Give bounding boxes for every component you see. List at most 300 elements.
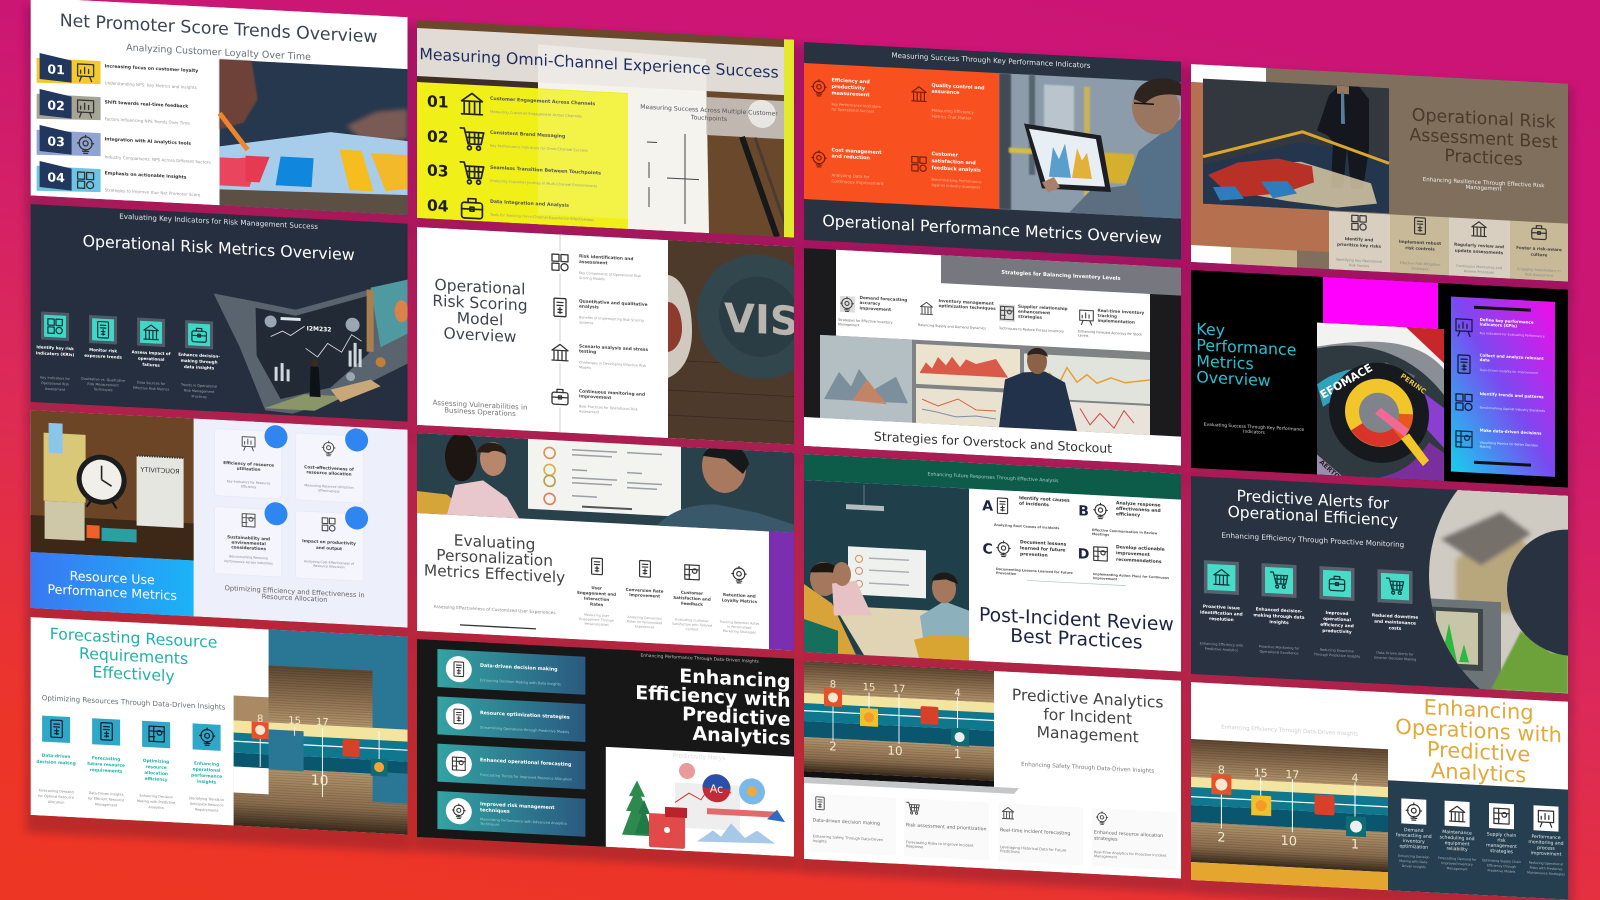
numbered item 02: 02 xyxy=(47,97,65,113)
kpi step: decisions: Making xyxy=(1480,445,1491,449)
step: enhancing: Enhancing xyxy=(194,761,219,768)
step: optimizing: efficiency xyxy=(145,776,168,783)
step: optimizing: Analytics xyxy=(148,805,164,810)
step: proactive issue xyxy=(1200,560,1243,653)
step: quantitative analysis: analysis xyxy=(579,303,599,310)
technique: forecasting: Enhanced operational forecasting xyxy=(480,757,572,768)
strategy: forecasting xyxy=(838,294,907,330)
item B: Analyze response xyxy=(1116,500,1161,509)
footer band xyxy=(804,417,1181,466)
metric text columns: Operational Risk xyxy=(41,381,69,387)
metric text columns: operational xyxy=(138,356,165,362)
metric: satisfaction: Against Industry Standards xyxy=(932,183,980,190)
step: demand forecasting: forecasting and xyxy=(1396,832,1432,840)
metric text columns: Enhance decision- xyxy=(178,352,220,359)
title: Operations with xyxy=(1395,714,1562,747)
timeline photo: 17 xyxy=(1285,768,1299,782)
step: enhancing: Anticipate Resource xyxy=(190,802,224,808)
card: productivity: Impact on productivity xyxy=(302,538,356,546)
step: improved efficiency: Reducing Downtime xyxy=(1320,648,1354,653)
step: forecasting: for Efficient Resource xyxy=(88,796,124,802)
title: Predictive Alerts for xyxy=(1237,487,1390,513)
metric: conversion xyxy=(626,560,664,630)
metric: quality: Measuring Efficiency xyxy=(932,108,974,115)
item 01: 01 xyxy=(427,93,449,112)
metric text columns: Identify key risk xyxy=(36,344,74,351)
step: proactive issue: identification and xyxy=(1200,609,1243,618)
step: identify: Identify and xyxy=(1345,236,1373,242)
item A xyxy=(982,493,1070,531)
card: resource allocation: Enhanced resource allocation xyxy=(1094,830,1163,839)
title: Effectively xyxy=(93,662,175,685)
faint subtitle: Enhancing Efficiency Through Data-Driven Insights xyxy=(1221,725,1358,738)
step: quantitative analysis xyxy=(549,296,648,328)
step: data-driven: decision making xyxy=(36,759,76,767)
kpi step: define: Key Indicators for Evaluating Performance xyxy=(1480,331,1545,338)
kpi step: decisions xyxy=(1456,426,1542,452)
step: maintenance: Forecasting Demand for xyxy=(1438,856,1477,862)
timeline photo with teal blocks: 17 xyxy=(316,717,329,729)
timeline photo with teal blocks xyxy=(234,628,408,835)
step: supply chain: Efficiency through xyxy=(1487,863,1516,869)
metric: satisfaction: Customer xyxy=(932,151,959,159)
collage: data dashboard silhouette xyxy=(214,270,409,420)
item A: A xyxy=(982,498,993,515)
numbered item 01: Understanding NPS: Key Metrics and Insights xyxy=(105,80,197,90)
step: proactive issue: resolution xyxy=(1209,616,1234,623)
step: review: Continuous Monitoring and xyxy=(1456,264,1502,270)
item C: Prevention xyxy=(996,571,1017,576)
card: efficiency: utilization xyxy=(237,466,261,472)
step: optimizing: Enhancing Decision xyxy=(139,794,173,799)
numbered item 01 xyxy=(37,53,198,91)
metric: satisfaction: Satisfaction and xyxy=(673,595,711,602)
item 04: Tools for Tracking Omni-Channel Experience Effectiveness xyxy=(489,213,594,222)
slide: Predictive Alerts for Operational Efficiency xyxy=(1191,476,1600,697)
step: decision making: insights xyxy=(1269,619,1289,626)
title: Assessment Best xyxy=(1409,125,1558,153)
step: forecasting: Forecasting xyxy=(92,755,120,763)
step: demand forecasting: Making with Data- xyxy=(1399,859,1428,864)
laptop with timeline graphic: 2 xyxy=(829,739,837,754)
metric text columns: Practices xyxy=(191,394,207,399)
gauge photo xyxy=(1317,322,1444,481)
technique: forecasting: Forecasting Trends for Improved Resource Allocation xyxy=(480,773,572,782)
item D: Implementing Action Plans for Continuous xyxy=(1093,572,1169,580)
step: culture: Risk Assessment xyxy=(1525,272,1554,278)
metric text columns: Effective Risk Metrics xyxy=(133,386,169,392)
photo: hand pointing at tablet chart xyxy=(220,59,408,215)
dark panel xyxy=(1388,780,1568,900)
step: proactive issue: Enhancing Efficiency with xyxy=(1200,641,1243,648)
item A: Analyzing Root Causes of Incidents xyxy=(994,523,1059,530)
subtitle: Enhancing Safety Through Data-Driven Insights xyxy=(1021,762,1154,775)
step: review: Review Processes xyxy=(1464,269,1494,275)
gauge photo: PERINC xyxy=(1399,372,1427,396)
item D: D xyxy=(1078,546,1089,563)
title: Model xyxy=(457,309,503,329)
item A: Identify root causes xyxy=(1019,495,1070,504)
metric: satisfaction: Customer xyxy=(681,590,703,596)
metric text columns xyxy=(36,344,220,400)
metric: efficiency: Efficiency and xyxy=(832,77,870,85)
kpi step: trends xyxy=(1456,390,1545,414)
item 02: Key Performance Indicators for Omni-Channel Success xyxy=(490,144,588,153)
step: identify: Risk Factors xyxy=(1349,263,1369,268)
title: Measuring Omni-Channel Experience Success xyxy=(419,44,779,82)
kpi step: decisions: Visualizing Metrics for Better Decision xyxy=(1480,441,1538,448)
card: resource allocation xyxy=(1092,808,1177,870)
subtitle: Touchpoints xyxy=(690,114,727,123)
step: supply chain: Predictive Models xyxy=(1488,868,1516,874)
item 02: Consistent Brand Messaging xyxy=(490,130,565,140)
step: optimizing: allocation xyxy=(144,770,168,777)
metric: engagement: Engagement and xyxy=(577,590,616,597)
metric text columns: Key Indicators for xyxy=(40,376,71,381)
item 01: Measuring Customer Engagement Across Channels xyxy=(490,110,582,119)
slide: Operational Performance Metrics Overview xyxy=(804,42,1181,260)
item 02: 02 xyxy=(427,128,449,147)
kpi step: define: indicators (KPIs) xyxy=(1480,322,1517,328)
metric: satisfaction: Benchmarking Performance xyxy=(932,178,982,184)
subtitle: Optimizing Resources Through Data-Driven Insights xyxy=(42,693,226,712)
strategy: supplier: strategies xyxy=(1018,314,1042,320)
metric: engagement: Interaction xyxy=(584,596,609,602)
item 04: Data Integration and Analysis xyxy=(490,199,569,209)
timeline photo: 1 xyxy=(1351,837,1359,853)
step: risk identification: Key Components of Operational Risk xyxy=(579,271,641,278)
step: improved efficiency: Through Predictive Insights xyxy=(1313,652,1360,659)
title: Resource Use xyxy=(70,568,155,587)
title: Risk Scoring xyxy=(432,292,528,315)
step: performance: Performance xyxy=(1531,834,1561,841)
step: optimizing: Optimizing xyxy=(143,758,169,765)
card: risk assessment xyxy=(904,798,989,861)
slide: Operational Risk Scoring Model Overview xyxy=(417,227,821,446)
step: identify xyxy=(1329,211,1390,272)
metric: conversion: Analyzing Conversion xyxy=(627,615,662,621)
metric: satisfaction: Evaluating Customer xyxy=(675,617,709,623)
numbered item 01: 01 xyxy=(47,61,65,77)
strategy: supplier xyxy=(998,303,1068,334)
metric: efficiency: productivity xyxy=(832,84,866,92)
strategy: tracking: Levels xyxy=(1078,333,1089,338)
magenta block xyxy=(1323,277,1438,329)
photo: businessman over broken red blocks xyxy=(1203,79,1389,213)
metric: cost: Continuous Improvement xyxy=(832,178,884,186)
metric: satisfaction: feedback analysis xyxy=(932,165,981,174)
metric text columns: exposure trends xyxy=(84,353,123,360)
card: data-driven xyxy=(811,793,896,856)
header band xyxy=(804,454,1181,500)
subtitle: Indicators xyxy=(1243,429,1266,436)
metric: cost: Cost management xyxy=(832,147,882,156)
timeline photo xyxy=(1191,739,1388,872)
laptop with timeline graphic: 8 xyxy=(830,679,836,691)
metric: satisfaction: Feedback xyxy=(681,601,703,607)
slide: Evaluating Personalization Metrics Effectively xyxy=(417,425,794,651)
photo: lightbulb and vision sign on wood: VIS xyxy=(724,295,799,345)
card: resource allocation: Management xyxy=(1094,854,1118,859)
title: Operational Risk Metrics Overview xyxy=(83,231,355,264)
slide: Enhancing Efficiency with Predictive Analytics xyxy=(417,639,794,857)
dark circle overlay xyxy=(1507,526,1600,659)
card: risk assessment: Forecasting Risks to Improve Incident xyxy=(906,840,974,848)
timeline photo: 15 xyxy=(1254,766,1268,780)
strategy: inventory: optimization techniques xyxy=(938,303,996,311)
illustration: predictive analytics scene: Predictivity Harys xyxy=(673,752,725,762)
step: demand forecasting xyxy=(1396,798,1432,870)
technique: risk management: Improved risk management xyxy=(480,801,555,811)
step: enhancing xyxy=(189,723,224,813)
metric: retention xyxy=(719,566,760,635)
card: sustainability: considerations xyxy=(231,544,266,551)
technique: resource optimization: Streamlining Operations through Predictive Models xyxy=(480,726,569,734)
card: real-time forecasting xyxy=(998,803,1083,866)
card: productivity: Analyzing Cost-Effectiveness of xyxy=(304,559,355,566)
subtitle: Assessing Vulnerabilities in xyxy=(433,399,527,412)
gold band xyxy=(1191,862,1388,890)
metric text columns: Qualitative vs. Qualitative xyxy=(81,377,125,383)
title: Personalization xyxy=(436,546,553,570)
strategy: tracking: tracking xyxy=(1098,313,1117,319)
step: maintenance xyxy=(1438,800,1477,872)
metric: conversion: Rates for Personalized xyxy=(627,619,662,625)
step: enhancing: Identifying Trends to xyxy=(189,796,224,802)
metric: engagement: User xyxy=(591,585,602,591)
step: improved efficiency xyxy=(1313,566,1360,659)
timeline photo: 4 xyxy=(1352,771,1358,785)
step: quantitative analysis: Benefits of Implementing Risk Scoring xyxy=(579,315,644,323)
metric: satisfaction: Satisfaction with Tailored xyxy=(672,622,712,628)
metric text columns: Risk Management xyxy=(184,388,215,394)
slide: Operational Risk Assessment Best Practices xyxy=(1191,64,1568,282)
step: supply chain: Supply chain xyxy=(1487,831,1516,839)
metric text columns: Assessment xyxy=(45,387,66,392)
title: Net Promoter Score Trends Overview xyxy=(60,11,377,48)
metric: quality: Quality control and xyxy=(932,83,985,91)
technique: resource optimization: Resource optimization strategies xyxy=(480,710,570,721)
card: sustainability: environmental xyxy=(231,539,266,546)
numbered item 03: Integration with AI analytics tools xyxy=(105,136,191,147)
item C: Document lessons xyxy=(1020,539,1067,548)
strategy: inventory xyxy=(918,297,996,331)
step: controls: Effective Risk Mitigation xyxy=(1400,261,1440,267)
step: risk identification: Risk identification and xyxy=(579,253,633,262)
step: continuous monitoring xyxy=(549,385,645,417)
card: risk assessment: Risk assessment and prioritization xyxy=(906,822,987,832)
step: culture xyxy=(1510,221,1568,282)
item B: Meetings xyxy=(1092,532,1109,537)
step: culture: Foster a risk-aware xyxy=(1516,245,1562,252)
slide: Predictive Analytics for Incident Management xyxy=(804,661,1181,879)
metric: retention: Marketing Strategies xyxy=(723,629,756,635)
step: decision making xyxy=(1253,563,1305,656)
photo: engineer with tablet xyxy=(999,70,1181,219)
step: performance: process xyxy=(1537,845,1555,852)
title: Post-Incident Review xyxy=(979,605,1174,636)
item 03: Analyzing Customer Journey in Multi-Channel Environments xyxy=(490,179,597,188)
slide: Post-Incident Review Best Practices xyxy=(804,454,1181,672)
top subtitle: Measuring Success Through Key Performance Indicators xyxy=(892,51,1091,70)
numbered item 01: Increasing focus on customer loyalty xyxy=(105,63,198,74)
step: supply chain: management xyxy=(1486,842,1517,850)
step: optimizing: Making with Predictive xyxy=(137,799,175,805)
laptop with timeline graphic xyxy=(804,661,1019,794)
gauge photo: EFOMACE xyxy=(1318,361,1375,401)
timeline spine xyxy=(559,234,561,432)
step: quantitative analysis: Quantitative and qualitative xyxy=(579,298,648,308)
metric text columns: Risk Measurement xyxy=(87,382,119,388)
timeline photo: 8 xyxy=(1218,763,1225,777)
step: improved efficiency: operational xyxy=(1323,616,1351,623)
numbered item 04 xyxy=(37,161,201,199)
card: sustainability: Benchmarking Resource xyxy=(229,554,268,560)
metric: satisfaction xyxy=(672,564,712,632)
step: maintenance: equipment xyxy=(1445,840,1470,847)
metric text columns: failures xyxy=(142,362,160,368)
card: efficiency: Efficiency of resource xyxy=(223,460,274,468)
strategy: inventory: Balancing Supply and Demand Dynamics xyxy=(918,323,986,330)
step: data-driven xyxy=(36,715,76,805)
title: Metrics Effectively xyxy=(424,561,565,587)
card: real-time forecasting: Predictions xyxy=(1000,849,1020,854)
step: demand forecasting: Driven Insights xyxy=(1402,864,1426,869)
title: Operational xyxy=(435,276,525,299)
strategy: forecasting: Demand forecasting xyxy=(860,295,907,302)
step: reduced downtime: and maintenance xyxy=(1374,619,1416,627)
strategy: supplier: enhancement xyxy=(1018,309,1050,315)
title band xyxy=(417,28,784,95)
item 01 xyxy=(428,92,595,118)
step: maintenance: Maintenance xyxy=(1442,829,1472,837)
step: demand forecasting: inventory xyxy=(1403,838,1425,845)
kpi step: collect: Collect and analyze relevant xyxy=(1480,353,1544,361)
subtitle: Optimizing Efficiency and Effectiveness in xyxy=(225,584,365,599)
technique: data-driven: Enhancing Decision Making with Data Insights xyxy=(480,678,561,686)
white step notch xyxy=(234,767,269,794)
subtitle: Evaluating Key Indicators for Risk Management Success xyxy=(119,212,318,231)
slide: Enhancing Operations with Predictive Analytics xyxy=(1191,682,1568,900)
timeline photo with teal blocks: 15 xyxy=(288,715,301,727)
metric text columns: data insights xyxy=(184,364,215,371)
step: enhancing: Requirements xyxy=(195,808,219,813)
item B: Effective Communication in Review xyxy=(1092,528,1157,535)
subtitle: Management xyxy=(1465,185,1503,193)
title: Overview xyxy=(444,324,517,346)
step: scenario analysis: Scenario analysis and stress xyxy=(579,343,648,353)
item D: improvement xyxy=(1116,550,1151,558)
metric icons xyxy=(41,312,213,349)
metric: retention: Retention and xyxy=(723,592,756,599)
laptop with timeline graphic: 4 xyxy=(954,688,961,699)
strategy: inventory: Inventory management xyxy=(938,298,994,306)
step: data-driven: Data-driven xyxy=(42,753,70,760)
metric: quality xyxy=(912,82,985,121)
step: demand forecasting: Demand xyxy=(1404,827,1424,834)
item C: C xyxy=(983,541,993,558)
step: improved efficiency: Improved xyxy=(1325,610,1349,617)
step: performance xyxy=(1527,805,1565,876)
numbered item 04: Emphasis on actionable insights xyxy=(105,170,187,181)
step: forecasting: future resource xyxy=(87,761,125,769)
kpi step: collect: data xyxy=(1480,357,1490,363)
kpi step: define xyxy=(1456,316,1545,340)
step: continuous monitoring: improvement xyxy=(579,393,611,401)
card: productivity xyxy=(296,503,368,582)
kpi step: define: Define key performance xyxy=(1480,317,1534,325)
numbered item 02: Factors Influencing NPS Trends Over Time xyxy=(105,116,190,126)
title: Performance xyxy=(1196,335,1296,359)
item 03: 03 xyxy=(427,162,449,181)
numbered item 03 xyxy=(37,125,211,165)
step: performance: monitoring and xyxy=(1528,839,1564,847)
step: proactive issue: Proactive issue xyxy=(1203,604,1240,612)
step: culture: Engaging Stakeholders in xyxy=(1517,267,1561,273)
step: decision making: Proactive Monitoring for xyxy=(1259,645,1300,651)
step: continuous monitoring: Assessment xyxy=(579,409,600,415)
subtitle: Assessing Effectiveness of Customized User Experiences xyxy=(434,604,556,616)
card: data-driven: Enhancing Safety Through Data-Driven xyxy=(813,834,883,842)
metric: quality: assurance xyxy=(932,89,960,96)
step: review xyxy=(1449,217,1510,279)
item 01: Customer Engagement Across Channels xyxy=(490,96,595,107)
metric text columns: Techniques xyxy=(93,387,113,392)
metric: engagement: Rates xyxy=(590,602,604,607)
strategy: tracking xyxy=(1078,307,1145,341)
item D: recommendations xyxy=(1116,557,1162,565)
step: risk identification xyxy=(549,251,641,283)
photo: incident review meeting xyxy=(804,480,969,661)
card: productivity: Resource Allocation xyxy=(313,564,345,569)
title: Operational Risk xyxy=(1412,105,1556,133)
corner colour blocks xyxy=(1191,64,1329,269)
step: improved efficiency: efficiency and xyxy=(1320,622,1354,629)
step: supply chain: strategies xyxy=(1490,848,1514,855)
card: sustainability xyxy=(215,499,288,577)
slide: Net Promoter Score Trends Overview xyxy=(31,0,408,215)
numbered item 03: 03 xyxy=(47,133,65,149)
gauge photo: AERTOMICT xyxy=(1318,458,1356,493)
card: cost effectiveness xyxy=(296,425,368,504)
kpi step: trends: Benchmarking Against Industry Standards xyxy=(1480,406,1545,413)
item 03: Seamless Transition Between Touchpoints xyxy=(490,165,601,177)
technique: risk management: Techniques xyxy=(479,822,500,827)
step: culture: culture xyxy=(1531,252,1548,258)
technique: data-driven: Data-driven decision making xyxy=(480,663,558,673)
metric: cost xyxy=(812,146,884,186)
item 03 xyxy=(428,161,601,188)
metric: engagement xyxy=(577,557,616,627)
photo: clock and notepad on wood desk xyxy=(31,410,194,560)
subtitle: Analyzing Customer Loyalty Over Time xyxy=(126,42,311,63)
laptop with timeline graphic: 10 xyxy=(887,743,903,758)
step: decision making: Operational Excellence xyxy=(1259,650,1299,656)
gradient panel xyxy=(1451,297,1555,477)
step: controls xyxy=(1390,214,1449,275)
metric text columns: Assess impact of xyxy=(132,349,171,356)
step: controls: risk controls xyxy=(1405,245,1435,252)
card: data-driven: Insights xyxy=(813,839,827,844)
subtitle: Enhancing Resilience Through Effective Risk xyxy=(1423,177,1545,189)
metric: cost: and reduction xyxy=(832,153,870,161)
slide: Strategies for Overstock and Stockout xyxy=(804,248,1181,466)
metric: retention: in Personalized xyxy=(727,625,751,630)
step: maintenance: reliability xyxy=(1446,846,1468,853)
metric text columns: making through xyxy=(181,358,218,365)
strategy: tracking: Real-time inventory xyxy=(1098,308,1145,315)
subtitle: Resource Allocation xyxy=(262,593,327,604)
